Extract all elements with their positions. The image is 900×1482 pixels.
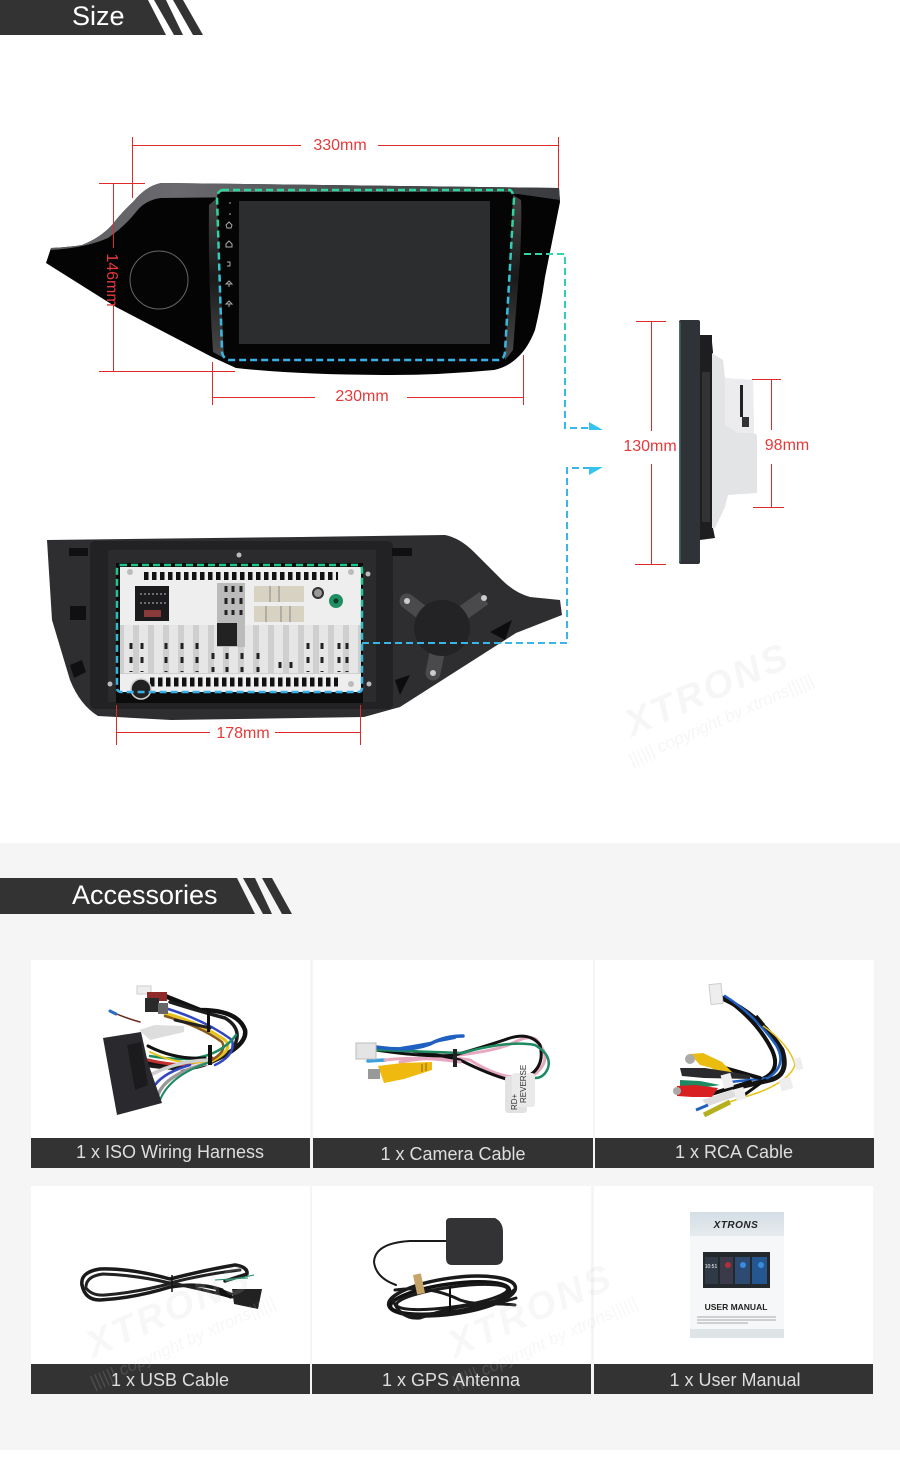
yellow RCA plug — [378, 1062, 432, 1083]
top vents — [144, 572, 338, 580]
panel: GPS antenna — [312, 1186, 591, 1394]
black power connector — [135, 586, 169, 621]
black ISO connector — [103, 1032, 162, 1115]
clips — [69, 548, 412, 678]
accessories section background — [0, 843, 900, 1450]
round label sticker — [131, 679, 151, 699]
white RCA plugs — [139, 1025, 184, 1040]
caption bar — [594, 1364, 873, 1394]
harness icon — [103, 986, 245, 1115]
user manual booklet: 10:51 — [705, 1264, 717, 1270]
caption: 1 x ISO Wiring Harness — [76, 1142, 264, 1162]
heatsink slots — [131, 643, 347, 672]
watermark: USB panel: XTRONS — [78, 1256, 258, 1367]
dimension: 230mm — [212, 355, 524, 405]
heading: Size: Size — [72, 1, 125, 31]
side button icons — [226, 203, 232, 307]
heading: Size — [0, 0, 203, 35]
dimension: 98mm: 98mm — [765, 437, 809, 454]
front view of head unit — [46, 183, 560, 375]
user manual booklet: XTRONS — [713, 1220, 758, 1231]
caption bar — [31, 1138, 310, 1168]
RCA cable icon — [673, 983, 803, 1115]
antenna puck — [446, 1218, 503, 1265]
dimension: 130mm — [623, 321, 677, 564]
caption: 1 x USB Cable — [111, 1370, 229, 1390]
camera cable icon: REVERSE — [519, 1065, 528, 1103]
dimension: 98mm — [752, 379, 809, 508]
watermark: GPS panel: |||||| copyright by xtrons|||||| — [449, 1293, 640, 1392]
panel: USB cable — [31, 1186, 310, 1394]
panel: RCA cable — [595, 960, 874, 1168]
watermark: GPS panel — [431, 1251, 640, 1392]
round vent ring — [130, 251, 188, 309]
green plug — [680, 1080, 720, 1088]
front panel body — [46, 183, 560, 375]
watermark: USB panel: |||||| copyright by xtrons|||||| — [87, 1293, 278, 1392]
rear inner frame — [90, 541, 393, 709]
caption bar — [595, 1138, 874, 1168]
dimension: 146mm — [99, 183, 235, 372]
centre vent column — [217, 583, 245, 647]
yellow plugs — [690, 1053, 722, 1069]
page background: white size section — [0, 0, 900, 843]
red plug — [677, 1085, 718, 1097]
panel: camera cable — [313, 960, 593, 1168]
connector slot — [740, 385, 743, 417]
left bezel strip — [209, 198, 224, 358]
watermark: size section: XTRONS — [617, 635, 797, 746]
right bezel strip — [505, 195, 521, 360]
disc mount with arms — [395, 595, 512, 695]
camera cable icon: RD+ — [510, 1093, 519, 1110]
bezel — [679, 320, 700, 564]
bottom white strip — [0, 1450, 900, 1482]
white plug — [702, 1090, 738, 1106]
watermark: GPS panel: XTRONS — [440, 1256, 620, 1367]
lower heatsink — [120, 625, 361, 674]
bracket — [700, 335, 715, 540]
dimension: 146mm: 146mm — [103, 253, 120, 307]
heading: Accessories: Accessories — [72, 880, 218, 910]
dimension: 130mm: 130mm — [623, 438, 677, 455]
USB plug — [232, 1289, 262, 1309]
white cable tags — [721, 1073, 734, 1089]
side connector: dashed arrow from rear view — [362, 467, 603, 643]
dimension: 230mm: 230mm — [335, 388, 389, 405]
caption: 1 x RCA Cable — [675, 1142, 793, 1162]
user manual booklet: USER MANUAL — [705, 1302, 767, 1312]
rear view of head unit — [47, 535, 562, 720]
caption bar — [31, 1364, 310, 1394]
chassis opening — [116, 563, 363, 703]
dimension: 330mm: 330mm — [313, 137, 367, 154]
dimension: 330mm — [132, 137, 559, 198]
panel: user manual — [594, 1186, 873, 1394]
dimension: 178mm — [116, 705, 360, 745]
caption bar — [313, 1138, 593, 1168]
dashed outline: front screen — [217, 190, 514, 360]
GPS antenna icon — [374, 1218, 518, 1323]
bottom vents — [150, 678, 338, 686]
side connector: dashed arrow to side view top — [524, 254, 603, 430]
heading: Accessories — [0, 878, 292, 914]
watermark: size section: |||||| copyright by xtrons|||||| — [626, 670, 816, 769]
caption: 1 x GPS Antenna — [382, 1370, 521, 1390]
watermark: USB panel — [69, 1251, 278, 1392]
watermark: size section — [608, 630, 816, 769]
dimension: 178mm: 178mm — [216, 725, 270, 742]
dashed outline: rear chassis — [117, 565, 362, 692]
user manual booklet — [690, 1212, 784, 1338]
screws — [108, 552, 372, 687]
panel: ISO wiring harness — [31, 960, 310, 1168]
caption: 1 x User Manual — [669, 1370, 801, 1390]
rear shell — [47, 535, 562, 720]
white connectors — [254, 586, 304, 602]
small lead tips — [696, 1105, 708, 1110]
top highlight band — [51, 183, 560, 250]
white plug — [356, 1043, 376, 1059]
manual screen image — [703, 1252, 770, 1288]
antenna sockets — [313, 588, 323, 598]
caption: 1 x Camera Cable — [380, 1144, 526, 1164]
USB cable icon — [82, 1265, 262, 1309]
side view of head unit — [679, 320, 757, 564]
screen panel — [217, 192, 513, 360]
screen — [239, 201, 490, 344]
chassis — [120, 567, 361, 692]
caption bar — [312, 1364, 591, 1394]
top connectors — [137, 986, 151, 994]
white multi-pin plug — [709, 983, 723, 1005]
camera cable icon — [356, 1036, 549, 1113]
black plug — [680, 1068, 750, 1079]
reverse tag — [505, 1076, 527, 1113]
white chassis — [712, 353, 757, 528]
